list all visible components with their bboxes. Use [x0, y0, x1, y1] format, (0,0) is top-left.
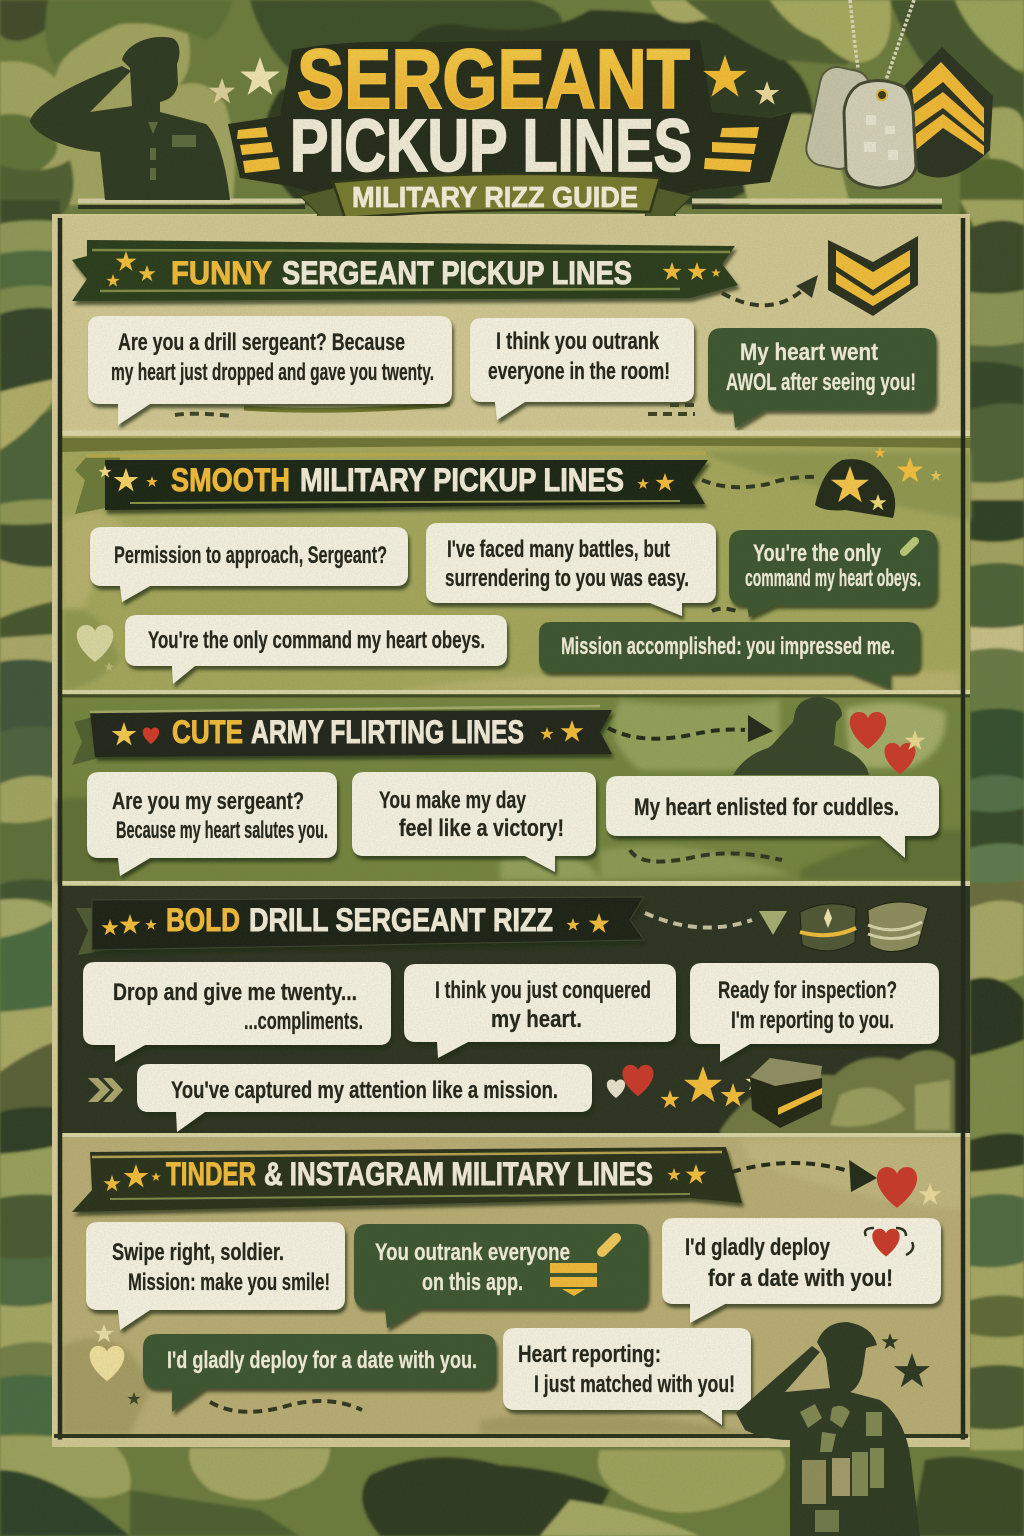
title header: [209, 32, 792, 232]
title: sergeant: SERGEANT: [297, 32, 690, 126]
speech bubble: [143, 1334, 496, 1412]
subtitle ribbon: MILITARY RIZZ GUIDE: [352, 182, 638, 214]
panel: cute army flirting lines: [58, 694, 970, 884]
speech bubble: You make my day: [379, 787, 526, 814]
speech bubble: I've faced many battles, but: [447, 536, 670, 563]
main panel frame: [52, 201, 970, 1447]
dashed squiggle: [630, 850, 782, 862]
speech bubble: My heart went: [740, 339, 878, 366]
icon: military box: [750, 1058, 822, 1128]
speech bubble: You've captured my attention like a mission.: [171, 1077, 558, 1104]
speech bubble: [87, 772, 337, 876]
panel: tinder and instagram military lines: [58, 1137, 970, 1437]
icon: cream heart and star: [90, 1324, 124, 1381]
dashed squiggle: [210, 1401, 362, 1412]
speech bubble: on this app.: [422, 1269, 523, 1296]
speech bubble: [662, 1218, 941, 1323]
speech bubble: [354, 1224, 648, 1328]
speech bubble: I just matched with you!: [534, 1371, 735, 1398]
speech bubble: [83, 962, 391, 1062]
dashed trail to beret: [702, 477, 818, 487]
speech bubble: [426, 523, 716, 616]
speech bubble: [90, 527, 408, 602]
title: pickup lines: PICKUP LINES: [290, 104, 692, 187]
arrow: dashed to caps: [645, 911, 787, 935]
speech bubble: I'd gladly deploy: [685, 1234, 830, 1261]
speech bubble: [125, 615, 507, 684]
icon: double chevron: [88, 1078, 123, 1102]
heading banner: SMOOTH: [171, 462, 290, 498]
right stars: [703, 55, 779, 105]
heading banner: [72, 1147, 742, 1212]
icon: rank stripes and pill: [550, 1238, 616, 1296]
panel: funny sergeant pickup lines: [58, 216, 970, 434]
heading banner: [72, 706, 612, 765]
heading banner: [75, 453, 708, 514]
speech bubble: for a date with you!: [708, 1265, 893, 1292]
heading banner: [76, 897, 644, 955]
speech bubble: ...compliments.: [244, 1008, 363, 1035]
arrow: dashed to soldier: [608, 715, 773, 742]
right rank stripes: [704, 127, 759, 172]
title backing plate: [228, 40, 792, 200]
speech bubble: I'd gladly deploy for a date with you.: [167, 1347, 477, 1374]
speech bubble: Heart reporting:: [518, 1341, 661, 1368]
arrow: dashed to heart: [732, 1160, 877, 1192]
icon: hearts and stars: [607, 1065, 764, 1108]
icon: beret with stars: [815, 447, 942, 518]
speech bubble: Because my heart salutes you.: [116, 817, 328, 844]
icon: saluting soldier silhouette: [30, 37, 230, 200]
speech bubble: [352, 772, 596, 872]
speech bubble: Mission: make you smile!: [128, 1269, 330, 1296]
speech bubble: [86, 1222, 345, 1330]
heading banner: [72, 240, 738, 301]
heading banner: SERGEANT PICKUP LINES: [282, 255, 632, 291]
speech bubble: Permission to approach, Sergeant?: [114, 542, 387, 569]
icon: saluting soldier with hearts: [733, 697, 925, 775]
speech bubble: I'm reporting to you.: [731, 1007, 894, 1034]
frame lines: [52, 218, 970, 1443]
speech bubble: You outrank everyone: [375, 1239, 570, 1266]
speech bubble: feel like a victory!: [399, 815, 564, 842]
left rank stripes: [237, 127, 280, 173]
icon: dog tags: [803, 0, 916, 188]
icon: chevron badge: [828, 236, 918, 316]
speech bubble: You're the only: [753, 540, 881, 567]
speech bubble: my heart just dropped and gave you twenty.: [111, 359, 434, 386]
heading banner: MILITARY PICKUP LINES: [300, 462, 624, 498]
speech bubble: AWOL after seeing you!: [726, 369, 916, 396]
heading banner: FUNNY: [171, 255, 272, 291]
heading banner: CUTE: [172, 714, 243, 750]
speech bubble: surrendering to you was easy.: [445, 565, 689, 592]
panel: bold drill sergeant rizz: [58, 883, 970, 1135]
icon: pale heart: [77, 625, 114, 671]
heading banner: ARMY FLIRTING LINES: [251, 714, 524, 750]
speech bubble: I think you outrank: [496, 328, 659, 355]
heading banner: DRILL SERGEANT RIZZ: [249, 902, 553, 938]
icon: dark stars: [127, 1333, 930, 1405]
icon: uniform details: [148, 122, 196, 180]
speech bubble: [606, 776, 939, 858]
speech bubble: [404, 964, 676, 1058]
speech bubble: [729, 530, 937, 617]
speech bubble: everyone in the room!: [488, 358, 670, 385]
icon: officer caps: [800, 902, 928, 952]
speech bubble: [503, 1328, 751, 1425]
subtitle ribbon: [300, 174, 692, 232]
speech bubble: My heart enlisted for cuddles.: [634, 794, 899, 821]
speech bubble: my heart.: [491, 1006, 582, 1033]
heading banner: TINDER: [166, 1156, 256, 1192]
speech bubble: Are you a drill sergeant? Because: [118, 329, 405, 356]
speech bubble: Swipe right, soldier.: [112, 1239, 284, 1266]
speech bubble: [708, 328, 936, 428]
speech bubble: Ready for inspection?: [718, 977, 897, 1004]
icon: sergeant rank patch: [902, 47, 993, 178]
speech bubble: [137, 1064, 592, 1132]
speech bubble: I think you just conquered: [435, 977, 651, 1004]
panel: smooth military pickup lines: [58, 436, 970, 694]
icon: saluting soldier silhouette bottom: [736, 1322, 920, 1536]
speech bubble: Are you my sergeant?: [112, 788, 304, 815]
left stars: [209, 57, 280, 103]
speech bubble: [470, 318, 694, 420]
speech bubble: You're the only command my heart obeys.: [148, 627, 485, 654]
heading banner: BOLD: [166, 902, 240, 938]
speech bubble: [690, 963, 939, 1062]
speech bubble: [539, 622, 920, 688]
speech bubble: [88, 316, 452, 425]
arrow: dashed to badge: [722, 275, 818, 305]
speech bubble: Drop and give me twenty...: [113, 979, 357, 1006]
camo patches on uniform: [800, 1404, 884, 1532]
heading banner: & INSTAGRAM MILITARY LINES: [264, 1156, 653, 1192]
icon: heart and star: [877, 1167, 941, 1208]
